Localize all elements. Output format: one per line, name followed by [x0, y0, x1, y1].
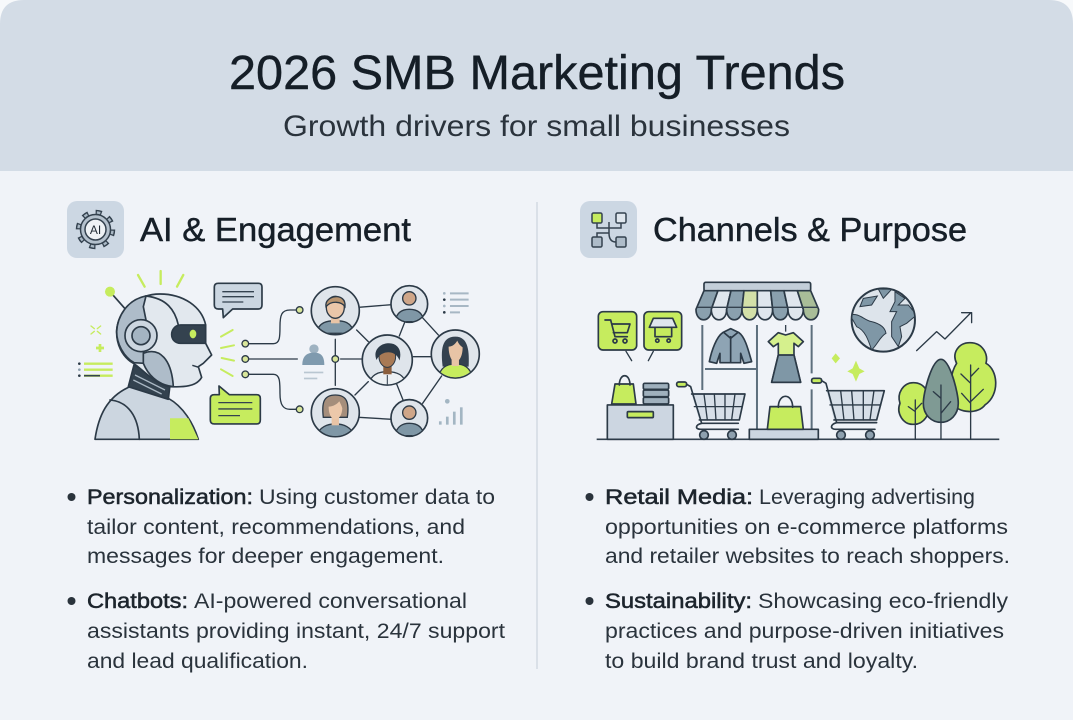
icon: bar signal [439, 399, 463, 425]
subtitle: Growth drivers for small businesses [283, 110, 790, 143]
bullet: Chatbots: Chatbots: [87, 589, 188, 613]
bullet: Personalization [68, 485, 495, 568]
icon: list [443, 292, 469, 314]
bullet: Sustainability: Showcasing eco-friendly [758, 589, 1008, 613]
bullet: Personalization: messages for deeper engagement. [87, 544, 444, 568]
retail tags [598, 312, 682, 361]
storefront [696, 282, 819, 439]
ground line [597, 437, 999, 442]
bullet: Chatbots [68, 589, 505, 673]
bullet: Retail Media: opportunities on e-commerce platforms [605, 515, 1008, 539]
bullet: Retail Media: Retail Media: [605, 485, 753, 509]
bullet: Chatbots: and lead qualification. [87, 649, 308, 673]
bullet: Sustainability: practices and purpose-driven initiatives [605, 619, 1004, 643]
panel: Channels & Purpose [580, 201, 1010, 673]
illustration: retail store and sustainability [597, 282, 999, 439]
title: 2026 SMB Marketing Trends [229, 47, 845, 100]
bullet: Sustainability: Sustainability: [605, 589, 752, 613]
speech bubbles [210, 283, 262, 424]
icon: channels flow [580, 201, 637, 258]
dress [768, 325, 803, 382]
illustration: robot and customer network [78, 271, 479, 439]
header band [0, 0, 1073, 171]
bullet: Personalization: Using customer data to [259, 485, 495, 509]
heading: AI & Engagement: AI & Engagement [140, 211, 411, 248]
icon: AI gear: AI [90, 223, 101, 237]
bullet: Sustainability: to build brand trust and loyalty. [605, 649, 918, 673]
jacket [709, 329, 752, 363]
icon: AI gear [67, 201, 124, 258]
icon: central audience [302, 344, 324, 379]
connectors [242, 305, 442, 419]
bullet: Retail Media [586, 485, 1010, 568]
heading: Channels & Purpose: Channels & Purpose [653, 211, 967, 248]
bullet: Chatbots: AI-powered conversational [194, 589, 467, 613]
trees [899, 343, 996, 439]
sparkles [832, 353, 865, 382]
bullet: Retail Media: Leveraging advertising [759, 485, 975, 509]
panel: AI & Engagement [67, 201, 505, 673]
customers network [311, 286, 479, 437]
bullet list: AI & Engagement [68, 485, 505, 673]
bullet: Personalization: Personalization: [87, 485, 253, 509]
robot [78, 271, 234, 439]
bullet: Retail Media: and retailer websites to reach shoppers. [605, 544, 1010, 568]
column divider [536, 202, 538, 669]
growth arrow [917, 313, 972, 351]
shopping bag [767, 396, 803, 429]
bullet: Personalization: tailor content, recommendations, and [87, 515, 465, 539]
shopping carts [677, 378, 884, 439]
bullet: Chatbots: assistants providing instant, 24/7 support [87, 619, 505, 643]
bullet list: Channels & Purpose [586, 485, 1010, 673]
checkout counter [607, 376, 673, 439]
globe [850, 288, 917, 352]
bullet: Sustainability [586, 589, 1008, 673]
